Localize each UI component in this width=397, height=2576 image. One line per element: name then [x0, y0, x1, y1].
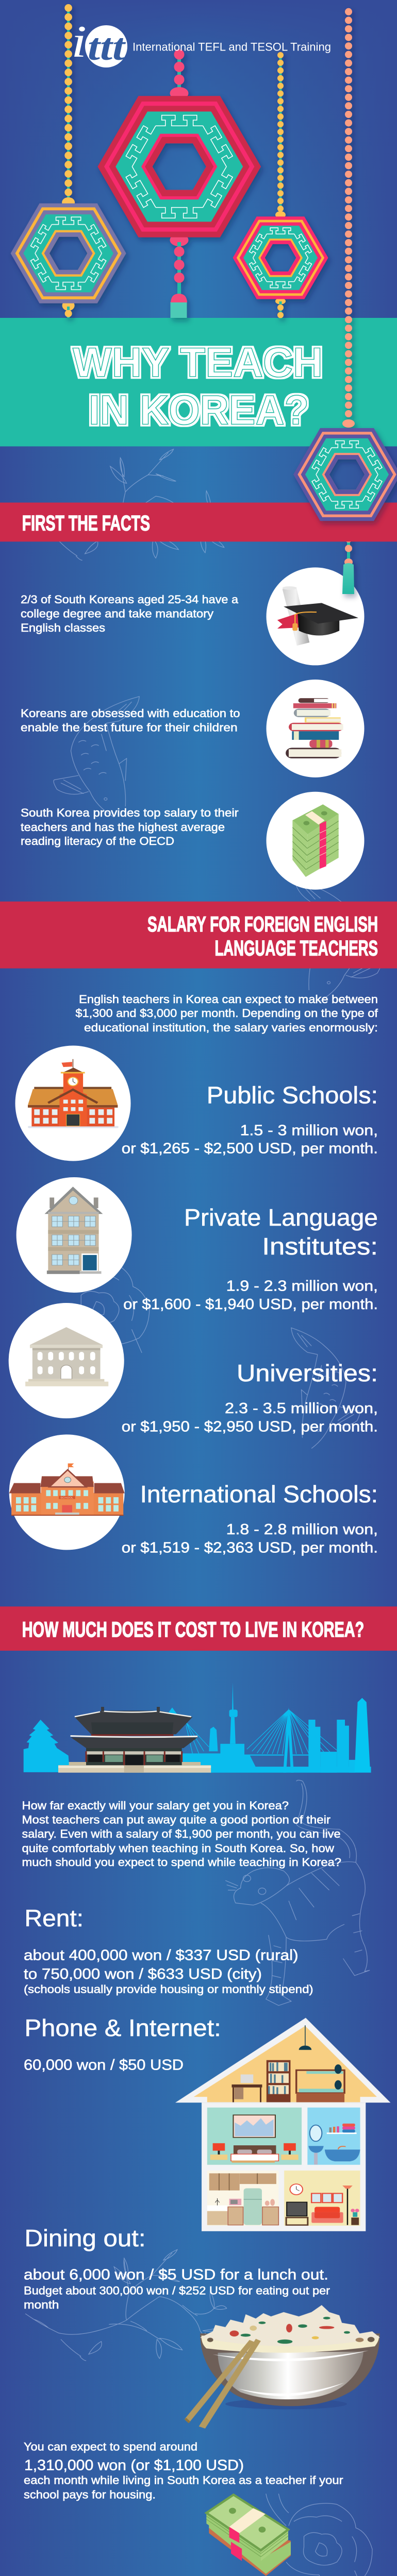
cost: dining out: about 6,000 won / $5 USD for a lunch out.	[24, 2267, 328, 2283]
text: teacher salary fact	[21, 806, 239, 848]
salary: universities: 2.3 - 3.5 million won,	[225, 1400, 378, 1417]
text: total monthly spend: 1,310,000 won (or $1,100 USD)	[24, 2458, 244, 2474]
text: total monthly spend: school pays for housing.	[24, 2488, 156, 2501]
text: how far will your salary go: quite comfortably when teaching in South Korea. So, how	[22, 1842, 334, 1855]
text: salary introduction	[75, 993, 378, 1034]
heading band: first the facts	[0, 503, 397, 541]
blue city skyline	[24, 1683, 371, 1773]
icon: tall stack of banknotes	[292, 804, 339, 877]
cost: rent: (schools usually provide housing or monthly stipend)	[24, 1983, 313, 1996]
text: total monthly spend: You can expect to spend around	[24, 2440, 197, 2453]
icon: stack of books	[286, 698, 343, 758]
cost: dining out: Budget about 300,000 won / $252 USD for eating out per	[24, 2284, 330, 2297]
circle with graduation cap icon	[266, 567, 364, 665]
illustration: Seoul skyline with palace	[24, 1683, 371, 1773]
salary: international schools: International Schools:	[140, 1481, 378, 1507]
logo: itt International TEFL and TESOL Training: i	[71, 17, 87, 67]
ornament: central pink beads, red hexagon and tassel	[97, 49, 261, 318]
salary: private language institutes: Institutes:	[262, 1233, 378, 1260]
circle with public school icon	[15, 1046, 131, 1161]
text: how far will your salary go: salary. Even with a salary of $1,900 per month, you can live	[22, 1827, 340, 1840]
cost: phone and internet: 60,000 won / $50 USD	[24, 2057, 184, 2073]
text: how far will your salary go: much should you expect to spend while teaching in Korea?	[22, 1856, 341, 1869]
text: total monthly spend: each month while living in South Korea as a teacher if your	[24, 2474, 343, 2487]
illustration: two stacks of banknotes	[206, 2495, 291, 2576]
salary: international schools: or $1,519 - $2,363 USD, per month.	[122, 1539, 378, 1556]
salary: public schools: 1.5 - 3 million won,	[240, 1123, 378, 1139]
circle with international school icon	[9, 1434, 125, 1550]
tassel over circle	[342, 563, 354, 594]
title: WHY TEACH	[73, 340, 323, 386]
icon: private language institute building	[44, 1187, 103, 1274]
text: obsessed with education fact: Koreans are obsessed with education to	[21, 707, 240, 720]
circle with money icon	[266, 792, 364, 890]
salary: public schools	[122, 1082, 378, 1157]
cost: phone and internet	[24, 2014, 221, 2073]
salary: international schools: 1.8 - 2.8 million won,	[226, 1521, 378, 1538]
heading band: salary	[0, 902, 397, 969]
salary: private language institutes: or $1,600 - $1,940 USD, per month.	[123, 1296, 378, 1313]
illustration: house cross-section	[175, 2018, 390, 2231]
logo: itt International TEFL and TESOL Training	[71, 17, 331, 69]
salary: international schools	[122, 1481, 378, 1556]
ornament: left yellow beads and purple hexagon	[11, 8, 126, 318]
heading band: cost of living	[0, 1606, 397, 1651]
circle with private institute icon	[16, 1177, 132, 1293]
salary: public schools: or $1,265 - $2,500 USD, per month.	[122, 1141, 378, 1157]
logo: itt International TEFL and TESOL Training: International TEFL and TESOL Training	[133, 41, 331, 54]
bedroom	[207, 2108, 302, 2165]
icon: public school building	[28, 1059, 119, 1128]
text: college degree fact: English classes	[21, 621, 105, 634]
heading band: first the facts: FIRST THE FACTS	[22, 511, 150, 535]
salary: universities: or $1,950 - $2,950 USD, per month.	[122, 1418, 378, 1435]
ornament: right yellow beads and pink hexagon	[233, 55, 328, 318]
hanging ornaments	[11, 8, 328, 318]
palace	[58, 1707, 211, 1773]
living room	[284, 2171, 360, 2226]
title: IN KOREA?	[89, 387, 309, 433]
icon: international school building: SCHOOL	[60, 1497, 73, 1499]
ornament: purple hexagon over band	[293, 428, 397, 521]
logo: itt International TEFL and TESOL Training: ttt	[88, 26, 126, 69]
icon: university building	[25, 1327, 108, 1386]
cost: rent	[24, 1905, 313, 1996]
salary: universities: Universities:	[237, 1360, 378, 1386]
title	[73, 340, 323, 433]
cost: phone and internet: Phone & Internet:	[25, 2014, 221, 2041]
text: total monthly spend	[24, 2440, 343, 2501]
circle with books icon	[266, 680, 364, 777]
cost: rent: Rent:	[25, 1905, 84, 1931]
cost: dining out: Dining out:	[25, 2225, 145, 2251]
background line art: branches, fish, peonies, tigers	[0, 449, 381, 2576]
illustration: rice bowl with chopsticks	[185, 2305, 380, 2429]
teal title band	[0, 318, 397, 446]
cost: dining out: month	[24, 2298, 59, 2311]
text: college degree fact: 2/3 of South Koreans aged 25-34 have a	[21, 593, 239, 606]
text: salary introduction: $1,300 and $3,000 per month. Depending on the type of	[75, 1007, 378, 1020]
kitchen	[207, 2171, 278, 2226]
text: college degree fact	[21, 593, 239, 634]
text: salary introduction: English teachers in Korea can expect to make between	[79, 993, 378, 1006]
icon: international school building	[9, 1463, 125, 1516]
salary: universities	[122, 1360, 378, 1435]
cost: rent: to 750,000 won / $633 USD (city)	[24, 1966, 262, 1982]
text: obsessed with education fact: enable the best future for their children	[21, 721, 238, 734]
text: teacher salary fact: teachers and has the highest average	[21, 821, 225, 834]
circle with university icon	[9, 1303, 124, 1418]
text: how far will your salary go	[22, 1799, 341, 1869]
text: how far will your salary go: Most teachers can put away quite a good portion of their	[22, 1813, 330, 1826]
salary: private language institutes	[123, 1204, 378, 1313]
cost: dining out	[24, 2225, 330, 2311]
salary: private language institutes: Private Language	[184, 1204, 378, 1231]
salary: private language institutes: 1.9 - 2.3 million won,	[226, 1278, 378, 1295]
attic room	[194, 2025, 377, 2102]
salary: public schools: Public Schools:	[207, 1082, 378, 1109]
text: teacher salary fact: South Korea provides top salary to their	[21, 806, 239, 819]
text: salary introduction: educational institution, the salary varies enormously:	[84, 1021, 378, 1034]
text: college degree fact: college degree and take mandatory	[21, 607, 213, 620]
cost: rent: about 400,000 won / $337 USD (rural)	[24, 1947, 299, 1963]
bathroom	[307, 2108, 360, 2165]
text: obsessed with education fact	[21, 707, 240, 734]
icon: graduation cap and diploma	[277, 586, 358, 646]
text: how far will your salary go: How far exactly will your salary get you in Korea?	[22, 1799, 289, 1812]
ornament: salmon beads with purple hexagon and tassel	[342, 12, 355, 566]
text: teacher salary fact: reading literacy of the OECD	[21, 835, 174, 848]
